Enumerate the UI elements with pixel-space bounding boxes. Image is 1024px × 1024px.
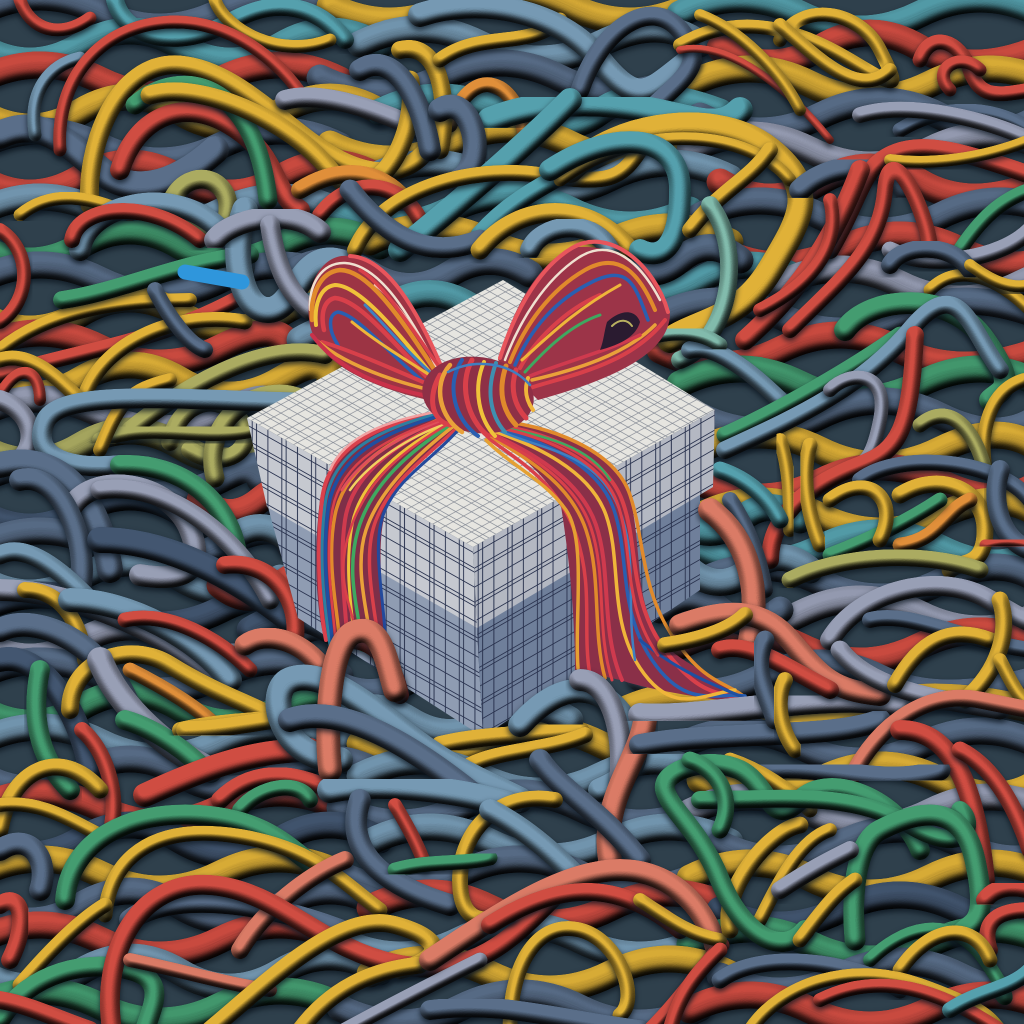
icon: bright blue cable tip [185,272,242,282]
left ribbon tail [316,410,460,655]
cable tangle: top middle [350,6,800,410]
right bow loop [498,242,670,400]
cable tangle: top right [680,15,1024,340]
cable tangle: bottom left [0,462,560,1024]
cable tangle: top left [0,0,525,233]
box lid [247,418,477,628]
box body [268,507,483,737]
ribbon knot [417,350,539,440]
gift box [247,280,715,737]
cable tangle: left middle [0,203,340,560]
cable tangle: foreground bottom middle [185,631,900,1024]
right ribbon tail [486,420,752,704]
cable tangle: right middle [720,303,1024,590]
ribbon bow [308,242,752,704]
left bow loop [308,256,442,400]
cable tangle: bottom right [665,510,1024,1024]
